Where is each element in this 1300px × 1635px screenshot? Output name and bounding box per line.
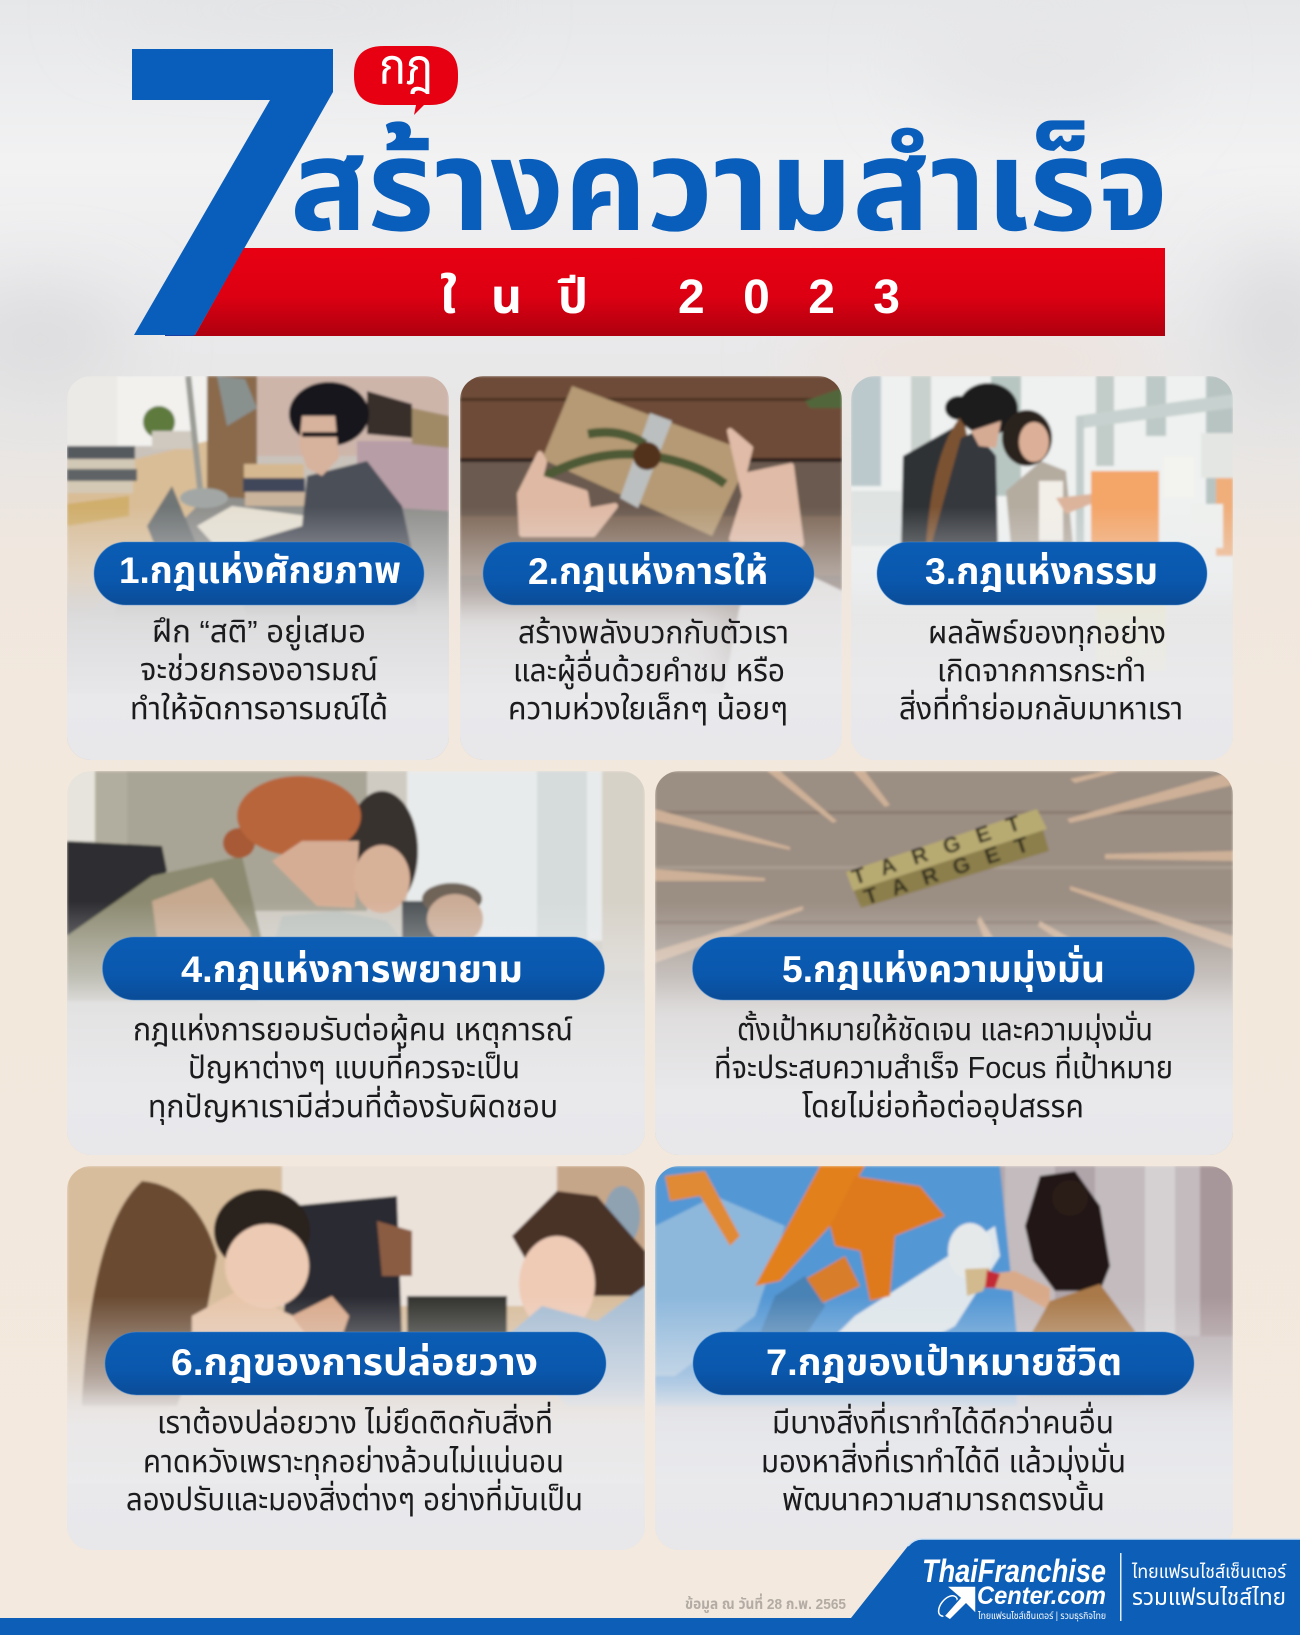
body text: เราต้องปล่อยวาง ไม่ยึดติดกับสิ่งที่	[157, 1401, 553, 1440]
panel: rule 4	[67, 771, 645, 1155]
panel: rule 2	[460, 376, 842, 760]
heading pill	[877, 542, 1207, 605]
body text	[714, 1010, 1173, 1125]
body text	[508, 615, 789, 726]
panel: rule 5	[655, 771, 1233, 1155]
photo: woman painting a canvas	[655, 1166, 1233, 1550]
photo: target blocks and toothpicks: TARGET	[849, 810, 1024, 890]
heading pill	[692, 937, 1194, 1000]
panel: rule 7	[655, 1166, 1233, 1550]
logo: ThaiFranchise Center.com	[922, 1553, 1106, 1622]
logo: ThaiFranchise Center.com: ThaiFranchise	[922, 1553, 1106, 1589]
body text: และผู้อื่นด้วยคำชม หรือ	[513, 649, 785, 689]
icon: arrow	[935, 1586, 976, 1620]
body text: กฎแห่งการยอมรับต่อผู้คน เหตุการณ์	[133, 1012, 573, 1048]
panel: rule 3	[851, 376, 1233, 760]
logo: ThaiFranchise Center.com: Center.com	[977, 1582, 1106, 1610]
heading pill	[94, 542, 424, 605]
body text	[899, 615, 1183, 726]
body text: ความห่วงใยเล็กๆ น้อยๆ	[508, 691, 788, 726]
body text: ทุกปัญหาเรามีส่วนที่ต้องรับผิดชอบ	[148, 1085, 558, 1125]
red speech bubble with กฎ: กฎ	[379, 39, 433, 95]
body text	[133, 1012, 573, 1125]
body text: เกิดจากการกระทำ	[937, 653, 1146, 688]
body text: ปัญหาต่างๆ แบบที่ควรจะเป็น	[188, 1046, 520, 1085]
red banner: ในปี 2023: ปี	[558, 271, 588, 324]
body text	[761, 1401, 1126, 1517]
heading pill: 1.กฎแห่งศักยภาพ	[119, 550, 401, 591]
red banner: ในปี 2023: ใน	[440, 271, 522, 324]
body text: มีบางสิ่งที่เราทำได้ดีกว่าคนอื่น	[772, 1401, 1114, 1440]
body text: ทำให้จัดการอารมณ์ได้	[130, 691, 388, 726]
panel: rule 1	[67, 376, 449, 760]
heading pill	[483, 542, 814, 605]
body text: พัฒนาความสามารถตรงนั้น	[782, 1480, 1105, 1517]
brand tagline	[1131, 1562, 1287, 1610]
title: สร้างความสำเร็จ: สร้างความสำเร็จ	[290, 115, 1168, 258]
body text: สร้างพลังบวกกับตัวเรา	[518, 615, 789, 650]
photo: office colleagues	[851, 376, 1233, 760]
body text: จะช่วยกรองอารมณ์	[140, 652, 378, 687]
body text: ผลลัพธ์ของทุกอย่าง	[928, 615, 1166, 651]
logo: ThaiFranchise Center.com: ไทยแฟรนไชส์เซ็นเตอร์ | รวมธุรกิจไทย	[977, 1609, 1106, 1622]
heading pill: 4.กฎแห่งการพยายาม	[181, 949, 523, 990]
body text: โดยไม่ย่อท้อต่ออุปสรรค	[802, 1089, 1084, 1125]
photo: hands holding a gift	[460, 376, 842, 760]
heading pill: 6.กฎของการปล่อยวาง	[171, 1342, 538, 1383]
brand tagline: ไทยแฟรนไชส์เซ็นเตอร์	[1131, 1562, 1287, 1583]
heading pill	[105, 1332, 606, 1395]
body text: ตั้งเป้าหมายให้ชัดเจน และความมุ่งมั่น	[737, 1010, 1153, 1048]
footer: blue brand band	[0, 1539, 1300, 1635]
red speech bubble with กฎ	[354, 39, 458, 115]
body text: ลองปรับและมองสิ่งต่างๆ อย่างที่มันเป็น	[126, 1478, 583, 1517]
heading pill: 7.กฎของเป้าหมายชีวิต	[766, 1342, 1122, 1383]
heading pill	[693, 1332, 1194, 1395]
heading pill: 2.กฎแห่งการให้	[528, 551, 768, 592]
body text: ฝึก “สติ” อยู่เสมอ	[152, 614, 366, 650]
red banner: ในปี 2023	[165, 248, 1165, 336]
body text: ที่จะประสบความสำเร็จ Focus ที่เป้าหมาย	[714, 1046, 1173, 1085]
heading pill	[102, 937, 604, 1000]
photo: target blocks and toothpicks	[655, 771, 1233, 1155]
date note: ข้อมูล ณ วันที่ 28 ก.พ. 2565	[685, 1593, 846, 1614]
title: big number 7	[132, 49, 333, 335]
photo: man working at desk	[67, 376, 449, 760]
photo: women laughing together	[67, 1166, 645, 1550]
red banner: ในปี 2023: 2023	[678, 271, 900, 324]
panel: rule 6	[67, 1166, 645, 1550]
brand tagline: รวมแฟรนไชส์ไทย	[1132, 1584, 1286, 1610]
photo: two women looking at work	[67, 771, 645, 1155]
body text: สิ่งที่ทำย่อมกลับมาหาเรา	[899, 687, 1183, 726]
body text	[130, 614, 388, 726]
photo: target blocks and toothpicks: TARGET	[861, 831, 1032, 910]
body text: มองหาสิ่งที่เราทำได้ดี แล้วมุ่งมั่น	[761, 1440, 1126, 1480]
body text: คาดหวังเพราะทุกอย่างล้วนไม่แน่นอน	[143, 1444, 564, 1480]
body text	[126, 1401, 583, 1517]
heading pill: 3.กฎแห่งกรรม	[925, 551, 1158, 592]
heading pill: 5.กฎแห่งความมุ่งมั่น	[782, 944, 1105, 992]
